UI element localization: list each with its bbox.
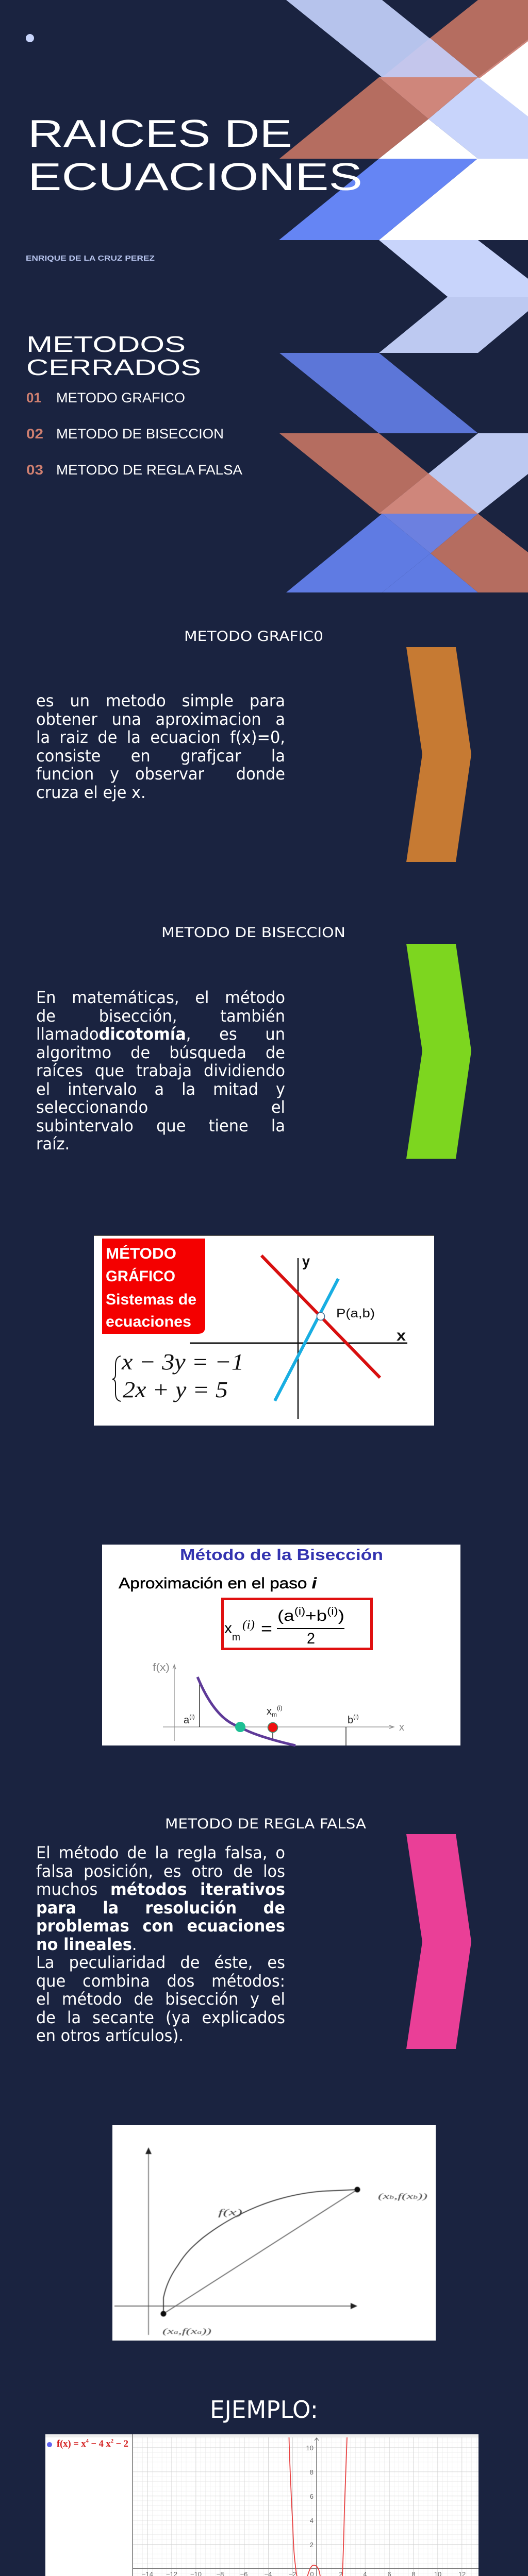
formula box: (a bbox=[277, 1607, 291, 1624]
axis labels bbox=[302, 1253, 406, 1344]
red label box: GRÁFICO bbox=[106, 1267, 175, 1285]
heading: metodo grafico: METODO GRAFIC0 bbox=[184, 629, 323, 645]
title: ECUACIONES bbox=[28, 155, 362, 198]
formula box bbox=[223, 1599, 371, 1649]
decorative dot bbox=[26, 34, 34, 42]
chevron: orange bbox=[406, 647, 471, 862]
curve labels: (x b,f(x b)) bbox=[378, 2192, 427, 2201]
curve labels bbox=[162, 2192, 427, 2336]
red label box: ecuaciones bbox=[106, 1313, 191, 1330]
y axis numbers bbox=[306, 2444, 314, 2576]
text block: metodo de regla falsa bbox=[36, 1844, 285, 2045]
function graph bbox=[153, 1662, 404, 1745]
equation system bbox=[112, 1349, 244, 1402]
graph grid bbox=[133, 2437, 478, 2576]
list of methods: 01 bbox=[26, 390, 41, 405]
curve and chord bbox=[161, 2187, 360, 2316]
equation system: 2x + y = 5 bbox=[123, 1377, 228, 1402]
image: metodo de la biseccion diagram bbox=[102, 1545, 460, 1745]
subtitle: metodos cerrados: CERRADOS bbox=[26, 355, 201, 380]
author: ENRIQUE DE LA CRUZ PEREZ bbox=[26, 254, 155, 263]
red label box: Sistemas de bbox=[106, 1291, 196, 1308]
list of methods: 02 bbox=[26, 426, 43, 442]
title: RAICES DE bbox=[28, 112, 292, 155]
formula box: (i) bbox=[242, 1618, 255, 1632]
function graph: (i) bbox=[277, 1704, 283, 1711]
algebra panel: − 2 bbox=[113, 2438, 128, 2449]
formula box: +b bbox=[305, 1607, 327, 1624]
heading: metodo de biseccion: METODO DE BISECCION bbox=[161, 925, 345, 941]
red label box: MÉTODO bbox=[106, 1245, 176, 1262]
text block: metodo de biseccion bbox=[36, 989, 285, 1153]
heading: metodo de regla falsa: METODO DE REGLA FALSA bbox=[165, 1816, 367, 1832]
y axis numbers: 2 bbox=[310, 2541, 314, 2549]
algebra panel: 2 bbox=[111, 2438, 114, 2444]
y axis numbers: 10 bbox=[306, 2444, 314, 2452]
title bbox=[28, 112, 362, 198]
formula box: (i) bbox=[294, 1606, 305, 1617]
heading: ejemplo: EJEMPLO: bbox=[210, 2396, 318, 2424]
diagram title: Método de la Bisección bbox=[180, 1546, 383, 1564]
list of methods: 03 bbox=[26, 462, 43, 478]
image: metodo grafico diagram bbox=[94, 1235, 434, 1426]
algebra panel: f(x) = x bbox=[57, 2438, 87, 2449]
list of methods: METODO DE REGLA FALSA bbox=[56, 462, 242, 478]
axes and lines bbox=[190, 1256, 407, 1419]
algebra panel bbox=[45, 2434, 133, 2576]
formula box: m bbox=[232, 1632, 240, 1643]
chevron: green bbox=[406, 944, 471, 1159]
function graph: x bbox=[399, 1722, 404, 1733]
axis labels: x bbox=[397, 1327, 406, 1344]
subtitle: Aproximación en el paso i bbox=[119, 1575, 317, 1592]
formula box: = bbox=[261, 1619, 272, 1638]
algebra panel: − 4 x bbox=[89, 2438, 111, 2449]
chevron: pink bbox=[406, 1834, 471, 2049]
algebra panel: 4 bbox=[86, 2438, 89, 2444]
formula box: 2 bbox=[307, 1630, 315, 1647]
function curve bbox=[289, 2437, 347, 2576]
x axis numbers bbox=[142, 2570, 466, 2576]
function graph: f(x) bbox=[153, 1662, 170, 1673]
text block: metodo grafico bbox=[36, 692, 285, 802]
subtitle: metodos cerrados bbox=[26, 332, 201, 380]
decorative geometric pattern: top right bbox=[279, 0, 528, 592]
equation system: x − 3y = −1 bbox=[121, 1349, 244, 1375]
formula box: ) bbox=[338, 1607, 344, 1624]
curve labels: (x a,f(x a)) bbox=[162, 2327, 211, 2336]
list of methods: METODO GRAFICO bbox=[56, 390, 185, 405]
subtitle: metodos cerrados: METODOS bbox=[26, 332, 186, 357]
function graph: m bbox=[272, 1711, 277, 1718]
formula box: (i) bbox=[327, 1606, 338, 1617]
axis labels: y bbox=[302, 1253, 310, 1270]
y axis numbers: 8 bbox=[310, 2468, 314, 2476]
list of methods bbox=[26, 390, 242, 478]
function graph: a bbox=[184, 1715, 189, 1726]
function graph: x bbox=[267, 1706, 272, 1717]
function graph: (i) bbox=[353, 1713, 359, 1720]
formula box: x bbox=[224, 1620, 232, 1637]
image: regla falsa diagram bbox=[112, 2125, 436, 2341]
axes bbox=[114, 2147, 357, 2335]
axis labels: P(a,b) bbox=[336, 1307, 375, 1320]
image: geogebra example graph bbox=[45, 2434, 478, 2576]
y axis numbers: 4 bbox=[310, 2517, 314, 2524]
red label box bbox=[102, 1239, 205, 1334]
curve labels: f(x) bbox=[218, 2207, 242, 2218]
list of methods: METODO DE BISECCION bbox=[56, 426, 224, 442]
function graph: b bbox=[348, 1715, 353, 1726]
y axis numbers: 6 bbox=[310, 2493, 314, 2500]
function graph: (i) bbox=[189, 1713, 195, 1720]
